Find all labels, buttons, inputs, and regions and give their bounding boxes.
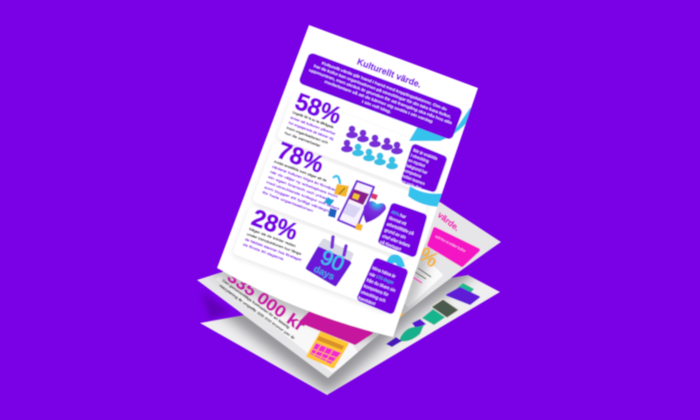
callout one: mellan teamen (401, 174, 425, 186)
heading on middle sheet: värde. (436, 210, 462, 233)
calendar label: days (312, 264, 336, 283)
stat 58% copy (284, 110, 339, 152)
white card (218, 265, 358, 371)
callout one: i utveckling (410, 153, 429, 164)
magenta panel (300, 310, 372, 344)
stat 58%: 58% (291, 88, 345, 130)
top sheet shadow on middle sheet (217, 250, 425, 337)
header copy: och hur vi mäter kultur (435, 234, 467, 254)
callout one: en mycket (408, 158, 426, 168)
stat 78% copy: sin egen bransch och yrkesroll (268, 175, 335, 203)
cyan arc (333, 176, 340, 184)
stat 78% copy: värderar kulturen högre än förmåner (271, 165, 337, 193)
cyan swoosh (409, 108, 482, 141)
phone banner (349, 189, 369, 205)
card three (234, 207, 397, 300)
header text: har de kollor kan organisationen på utvecklingar för din take bara kultur, (313, 64, 452, 119)
callout three: kompetens för (363, 283, 390, 297)
header text: medarbetare så att de känner sig sedda i sin vardag (324, 80, 433, 124)
title: Kulturellt värde. (356, 57, 423, 90)
stat 28% copy: under introduktionen hur länge (246, 232, 302, 256)
teal block (422, 308, 446, 326)
calendar (308, 333, 347, 367)
bottom sheet shadow (197, 262, 470, 378)
piggy bank (400, 325, 424, 341)
callout three: från du ökare sin (366, 277, 397, 293)
stat 78%: 78% (274, 137, 327, 179)
stat 28% copy (242, 227, 306, 267)
cyan ring (273, 254, 301, 282)
phone (338, 181, 374, 228)
purple tile (412, 319, 426, 330)
callout three: utveckling och (360, 289, 387, 303)
callout three: när 170 dagar (369, 271, 395, 285)
header text (305, 58, 456, 135)
middle sheet (197, 202, 501, 378)
phone illustration (324, 176, 386, 231)
stat 28%: 28% (248, 204, 301, 246)
tile mark (339, 188, 345, 194)
top sheet (217, 25, 482, 337)
stat 78% copy: för hela organisationen (262, 190, 314, 213)
card shadows (232, 101, 410, 312)
callout one: Bär är enskilda (413, 148, 439, 161)
stat 78% copy: Andel anställda som säger att de (273, 160, 327, 183)
callout two: lämnat ett (388, 215, 408, 227)
stat 78% copy: med utvecklande kollegor och ledare (266, 180, 340, 211)
photo (431, 299, 459, 318)
stat 58% copy: inom organisationen och (286, 126, 329, 145)
description line two: rekrytering är ungefär 335 000 kronor per år (218, 284, 297, 341)
purple label on bottom sheet (447, 288, 479, 304)
calendar top strip (319, 240, 352, 261)
stat 78% copy: som bygger ett tydligt värdegrund (264, 185, 336, 216)
navy tile (328, 208, 337, 218)
stat 78% copy (262, 160, 348, 222)
cyan arc lower (408, 186, 446, 207)
orange percent: % (414, 243, 443, 273)
cyan row (352, 144, 398, 169)
header text: Kulturellt värde går hand i hand med kopplingsfaktorer. Om du (321, 61, 447, 111)
stat 58% copy: hur de samarbetar (284, 131, 322, 148)
pin left (332, 237, 333, 247)
phone rows (343, 203, 361, 218)
callout two (379, 207, 423, 254)
callout two: 46% har (391, 209, 407, 220)
callout one: idag varje dag. (398, 179, 423, 191)
right white card (405, 258, 443, 307)
calendar icon (308, 237, 352, 284)
heart (363, 201, 386, 223)
card two (252, 141, 430, 259)
card one (276, 95, 448, 196)
purple row (341, 126, 403, 154)
header text: i sin roll idag. (361, 100, 392, 114)
magenta header (429, 229, 478, 265)
stat 78% copy: när de väljer ny arbetsgivare inom (269, 170, 338, 199)
mockup scene (196, 24, 502, 396)
stat 58% copy: hur engagerade de känner sig (288, 121, 334, 141)
pin right (344, 246, 346, 255)
description: Den genomsnittliga kostnaden för en felaktig (221, 279, 291, 330)
callout two: chef eller ledare (382, 233, 411, 248)
stat 58% copy: Ungefär 58 % av de tillfrågade (292, 110, 334, 130)
header text: uppmuntran, men skräck är grunden för att framgång ska nås hos alla (309, 68, 452, 125)
callout two: arbetstillfälle på (386, 221, 415, 236)
sheet shadow (202, 292, 230, 319)
bottom sheet (197, 262, 500, 395)
callout two: grund av sin (384, 227, 407, 240)
people icons (341, 126, 403, 169)
header panel (298, 52, 463, 140)
blue tile (324, 197, 334, 206)
callout three: Mina hälsa är (372, 265, 397, 279)
orange tile (355, 223, 363, 231)
phone banner accent (352, 193, 360, 200)
callout three: framtiden! (357, 295, 376, 306)
stat 28% copy: de faktiskt stannar hos företaget (244, 237, 302, 262)
stat 28% copy: Säger att de tvivlar redan (248, 227, 296, 248)
percent copy accent (411, 276, 422, 283)
percent copy (415, 268, 431, 279)
callout two: på företaget (379, 239, 402, 252)
yellow tile (334, 184, 349, 197)
calendar number: 90 (317, 246, 348, 276)
callout one: bakgrund har (405, 163, 428, 175)
stat 58% copy: anser att kulturen påverkar (290, 115, 337, 136)
calendar body (308, 249, 349, 284)
callout one (398, 147, 443, 193)
amount: 335 000 kr (224, 268, 309, 336)
stat 28% copy: de första 90 dagarna. (242, 242, 285, 262)
purple tile low (386, 337, 402, 347)
teal behind label (456, 282, 474, 293)
small orange shape (400, 312, 404, 318)
red tile (371, 193, 378, 200)
callout three (357, 262, 404, 312)
cyan ring arc (386, 254, 405, 267)
upper description: kostar det för er (267, 282, 298, 305)
callout one: kompetens (403, 168, 422, 179)
